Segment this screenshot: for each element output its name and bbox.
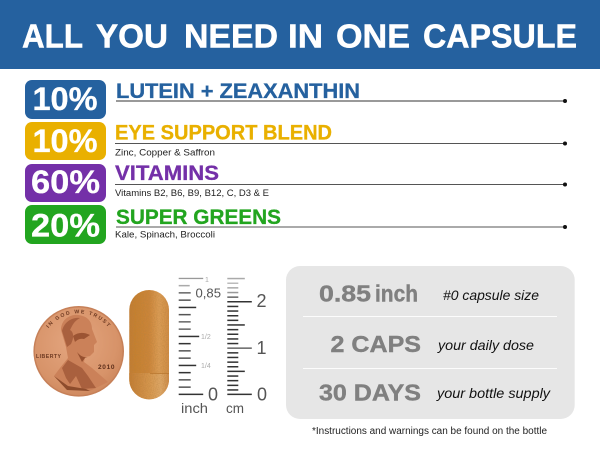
row: vitamins: Vitamins B2, B6, B9, B12, C, D3 & E	[115, 188, 269, 198]
panel: capsule facts: 30 DAYS	[319, 380, 421, 406]
row: lutein + zeaxanthin: LUTEIN + ZEAXANTHIN	[116, 80, 360, 103]
panel: capsule facts: 0.85	[319, 281, 371, 307]
icon: penny coin: IN GOD WE TRUST	[46, 310, 110, 328]
icon: penny coin	[33, 306, 124, 397]
row: eye support blend: EYE SUPPORT BLEND	[115, 122, 332, 144]
row: super greens: Kale, Spinach, Broccoli	[115, 230, 215, 240]
panel: capsule facts: your bottle supply	[436, 385, 551, 401]
cm ruler	[226, 278, 267, 416]
title: CAPSULE	[423, 18, 577, 56]
cm ruler: 0	[257, 384, 267, 404]
cm ruler: 2	[256, 291, 267, 311]
row: eye support blend: 10%	[32, 123, 98, 159]
cm ruler: 1	[256, 338, 267, 358]
row: super greens: 20%	[31, 208, 100, 244]
panel: capsule facts: 2 CAPS	[330, 331, 421, 357]
row: vitamins: 60%	[31, 164, 100, 200]
row: lutein + zeaxanthin: 10%	[32, 81, 98, 117]
row: super greens	[25, 205, 567, 244]
inch ruler: 1/4	[201, 363, 211, 370]
title	[22, 18, 577, 56]
panel: capsule facts	[286, 266, 575, 419]
title: NEED	[184, 18, 278, 56]
row: vitamins: VITAMINS	[115, 162, 219, 185]
cm ruler: cm	[226, 400, 244, 416]
title: IN	[288, 18, 323, 56]
row: lutein + zeaxanthin	[25, 80, 567, 119]
row: super greens: SUPER GREENS	[116, 206, 281, 229]
panel: capsule facts: inch	[375, 281, 418, 307]
title: ONE	[336, 18, 410, 56]
inch ruler: 1/2	[201, 334, 211, 341]
row: eye support blend	[25, 122, 567, 160]
icon: penny coin: LIBERTY	[36, 354, 62, 360]
panel: capsule facts: your daily dose	[437, 337, 534, 353]
header banner	[0, 0, 600, 69]
inch ruler: 0	[208, 384, 218, 404]
icon: capsule	[129, 290, 169, 399]
row: eye support blend: Zinc, Copper & Saffron	[115, 148, 215, 158]
inch ruler: 1	[205, 277, 209, 284]
footnote: *Instructions and warnings can be found on the bottle	[312, 426, 547, 437]
row: vitamins	[25, 162, 567, 202]
inch ruler: 0,85	[196, 286, 221, 300]
icon: penny coin: 2010	[98, 364, 115, 371]
inch ruler	[179, 277, 221, 416]
panel: capsule facts: #0 capsule size	[443, 287, 539, 303]
title: ALL	[22, 18, 83, 56]
inch ruler: inch	[181, 400, 208, 416]
title: YOU	[96, 18, 168, 56]
